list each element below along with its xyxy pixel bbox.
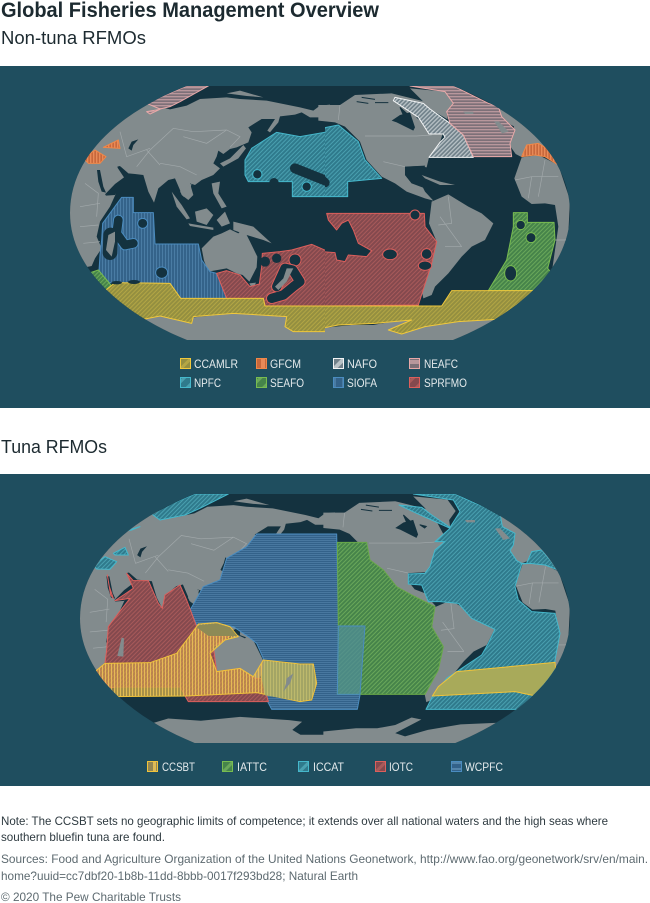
regions: right half of the map: [318, 86, 558, 334]
legend item SIOFA: [334, 376, 377, 390]
legend item NEAFC: NEAFC: [424, 357, 458, 371]
world map base: [44, 494, 570, 746]
legend item NAFO: NAFO: [347, 357, 377, 371]
legend item NEAFC: [410, 357, 458, 371]
legend: tuna RFMOs: [148, 760, 503, 774]
note: southern bluefin tuna are found.: [1, 831, 165, 844]
legend item CCAMLR: [180, 357, 238, 371]
legend item ICCAT: [298, 760, 345, 774]
legend item WCPFC: WCPFC: [465, 760, 503, 774]
legend item IATTC: [222, 760, 267, 774]
legend item GFCM: GFCM: [270, 357, 301, 371]
legend item SEAFO: SEAFO: [270, 376, 304, 390]
British Isles and Iceland: [463, 112, 509, 133]
legend item ICCAT: ICCAT: [313, 760, 345, 774]
legend item WCPFC: [452, 760, 503, 774]
legend item CCSBT: CCSBT: [162, 760, 196, 774]
sources: Sources: Food and Agriculture Organization of the United Nations Geonetwork, http://www.fao.org/geonetwork/srv/en/main.: [1, 853, 648, 866]
note: Note: The CCSBT sets no geographic limits of competence; it extends over all national waters and the high seas where: [1, 815, 608, 828]
subtitle: Non-tuna RFMOs: Non-tuna RFMOs: [1, 27, 146, 48]
legend item SEAFO: [256, 376, 304, 390]
seamount holes: [106, 168, 328, 298]
heading: Tuna RFMOs: Tuna RFMOs: [1, 436, 107, 457]
regions: [93, 494, 560, 709]
legend item IOTC: IOTC: [389, 760, 413, 774]
sources: [1, 853, 648, 883]
legend item CCAMLR: CCAMLR: [194, 357, 238, 371]
legend item SPRFMO: [410, 376, 467, 390]
sources: home?uuid=cc7dbf20-1b8b-11dd-8bbb-0017f293bd28; Natural Earth: [1, 870, 358, 883]
legend item NPFC: [180, 376, 221, 390]
regions: left half of the map: [83, 86, 558, 334]
legend item SPRFMO: SPRFMO: [424, 376, 467, 390]
legend item NAFO: [334, 357, 377, 371]
panel: non-tuna map: [0, 66, 650, 408]
British Isles and Iceland: [465, 520, 510, 540]
panel: tuna map: [0, 474, 650, 786]
legend item CCSBT: [148, 760, 196, 774]
world map base: [33, 86, 570, 343]
legend item SIOFA: SIOFA: [347, 376, 377, 390]
legend item IATTC: IATTC: [237, 760, 267, 774]
legend item IOTC: [376, 760, 413, 774]
note: [1, 815, 608, 844]
legend item NPFC: NPFC: [194, 376, 221, 390]
legend item GFCM: [256, 357, 301, 371]
legend: non-tuna RFMOs: [180, 357, 467, 390]
